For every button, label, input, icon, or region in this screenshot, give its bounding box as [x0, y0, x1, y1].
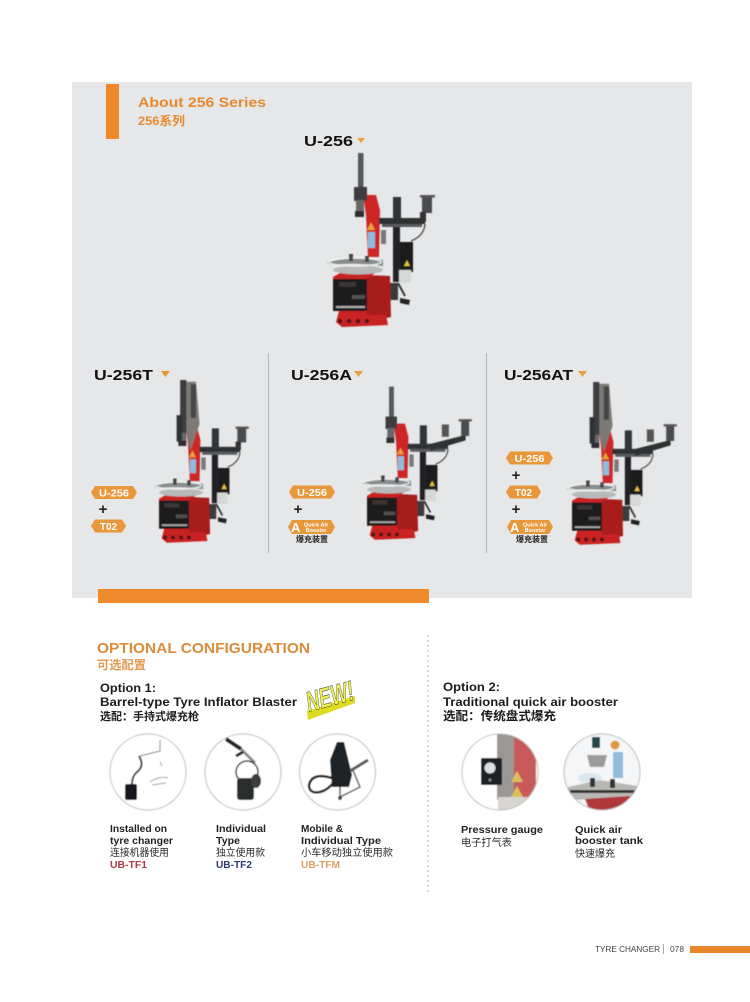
icon: quick air booster tank — [564, 734, 640, 812]
caption: individual: 独立使用款 — [216, 846, 265, 859]
pills: U-256T formula — [91, 486, 137, 533]
product: U-256AT machine — [567, 382, 677, 545]
pills: U-256T formula: T02 — [100, 522, 118, 533]
option 1 text: 选配：手持式爆充枪 — [100, 709, 199, 723]
caption: individual — [216, 824, 266, 871]
pills: U-256AT formula: Booster — [525, 528, 546, 534]
pills: U-256T formula: + — [99, 501, 108, 518]
caption: individual: Type — [216, 836, 240, 847]
product: U-256 machine — [327, 153, 435, 327]
caption: pressure gauge: 电子打气表 — [461, 836, 512, 849]
pills: U-256AT formula: 爆充装置 — [516, 534, 548, 544]
heading: U-256: U-256 — [304, 133, 353, 150]
option 2 text — [443, 680, 618, 723]
caption: individual: Individual — [216, 824, 266, 835]
caption: mobile — [301, 824, 393, 871]
caption: pressure gauge — [461, 825, 543, 849]
icon: NEW badge — [305, 675, 355, 720]
orange title tab — [106, 84, 119, 139]
heading: U-256T: U-256T — [94, 367, 153, 384]
caption: mobile: 小车移动独立使用款 — [301, 846, 393, 859]
pills: U-256A formula: + — [294, 501, 303, 518]
pills: U-256AT formula: Quick Air — [523, 522, 548, 528]
option 2 text: Traditional quick air booster — [443, 695, 618, 709]
pills: U-256AT formula: U-256 — [514, 454, 545, 465]
footer — [595, 944, 750, 954]
pills: U-256AT formula: + — [512, 501, 521, 518]
option 1 text: Option 1: — [100, 681, 156, 695]
caption: individual: UB-TF2 — [216, 860, 252, 871]
option 2 text: Option 2: — [443, 680, 500, 694]
caption: installed: UB-TF1 — [110, 860, 147, 871]
pills: U-256A formula: Quick Air — [304, 522, 329, 528]
pills: U-256A formula: Booster — [306, 528, 327, 534]
caption: mobile: UB-TFM — [301, 860, 340, 871]
title: 256系列 — [138, 113, 185, 128]
pills: U-256A formula — [288, 486, 335, 544]
product: U-256T machine — [154, 380, 249, 543]
footer: TYRE CHANGER — [595, 945, 660, 954]
orange divider bar — [98, 589, 429, 603]
caption: quick air tank: booster tank — [575, 836, 643, 847]
section heading: 可选配置 — [97, 658, 146, 672]
caption: installed: 连接机器使用 — [110, 846, 169, 859]
heading: U-256 — [304, 133, 365, 150]
pills: U-256AT formula: + — [512, 467, 521, 484]
option 1 text — [100, 681, 297, 723]
caption: mobile: Individual Type — [301, 836, 381, 847]
pills: U-256AT formula — [506, 452, 553, 544]
grey series panel — [72, 82, 692, 598]
option 2 text: 选配：传统盘式爆充 — [443, 708, 556, 723]
icon: installed on tyre changer — [110, 734, 186, 810]
caption: installed: tyre changer — [110, 836, 173, 847]
icon: pressure gauge — [462, 730, 540, 812]
pills: U-256AT formula: A — [510, 520, 520, 535]
dashed vertical divider — [427, 635, 429, 892]
pills: U-256A formula: 爆充装置 — [296, 534, 328, 544]
icon: NEW badge: NEW! — [305, 675, 355, 718]
product: U-256A machine — [362, 387, 472, 540]
option 1 text: Barrel-type Tyre Inflator Blaster — [100, 695, 297, 709]
icon: mobile individual type — [300, 734, 376, 810]
title: About 256 Series — [138, 94, 266, 110]
pills: U-256AT formula: T02 — [515, 488, 533, 499]
caption: quick air tank — [575, 825, 643, 860]
caption: mobile: Mobile & — [301, 824, 343, 835]
title — [138, 94, 266, 128]
pills: U-256A formula: U-256 — [297, 488, 327, 499]
caption: quick air tank: 快速爆充 — [575, 847, 615, 860]
heading: U-256A: U-256A — [291, 367, 352, 384]
section heading — [97, 640, 310, 672]
caption: installed — [110, 824, 173, 871]
caption: pressure gauge: Pressure gauge — [461, 825, 543, 836]
section heading: OPTIONAL CONFIGURATION — [97, 640, 310, 657]
heading: U-256T — [94, 367, 170, 384]
caption: installed: Installed on — [110, 824, 167, 835]
caption: quick air tank: Quick air — [575, 825, 622, 836]
icon: individual type — [205, 734, 281, 810]
pills: U-256T formula: U-256 — [99, 488, 129, 500]
heading: U-256AT: U-256AT — [504, 367, 573, 384]
pills: U-256A formula: A — [291, 520, 301, 535]
footer: 078 — [670, 945, 685, 954]
